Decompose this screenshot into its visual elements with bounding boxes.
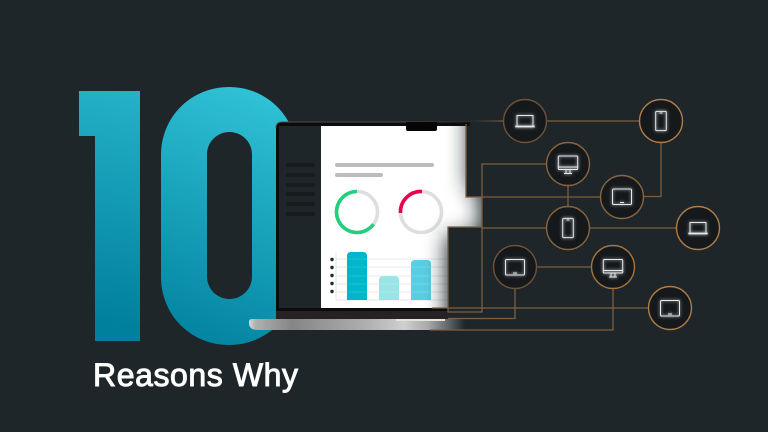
hinge [276,311,448,319]
sidebar menu lines [286,163,315,216]
laptop [249,122,482,330]
axis dots [330,258,334,293]
base highlight [396,319,445,321]
camera notch [406,122,437,131]
node: tablet 3 [648,286,692,330]
node: laptop 1 [504,100,546,142]
red donut [400,191,442,232]
header lines [335,163,434,177]
dashboard screen [321,126,482,308]
heading: Reasons Why: Reasons Why [93,357,298,393]
laptop lid [276,122,470,312]
screen fade [428,126,482,308]
node: phone 1 [640,100,682,142]
numeral 10 [79,87,297,345]
digit 0 [161,87,297,345]
white screen [321,126,482,308]
node: phone 2 [546,206,590,250]
node: tablet 1 [600,176,644,218]
node: tablet 2 [494,246,536,288]
green donut [336,192,378,232]
node: monitor 1 [546,142,590,186]
laptop base [249,319,465,330]
digit 1 [79,91,140,341]
bars [347,252,367,300]
connector lines [430,121,676,330]
bar chart [330,252,448,300]
node: monitor 2 [592,246,634,288]
network nodes [494,100,720,330]
lid rim [276,122,470,128]
lid sidebar [279,126,321,308]
node: laptop 2 [676,206,720,250]
